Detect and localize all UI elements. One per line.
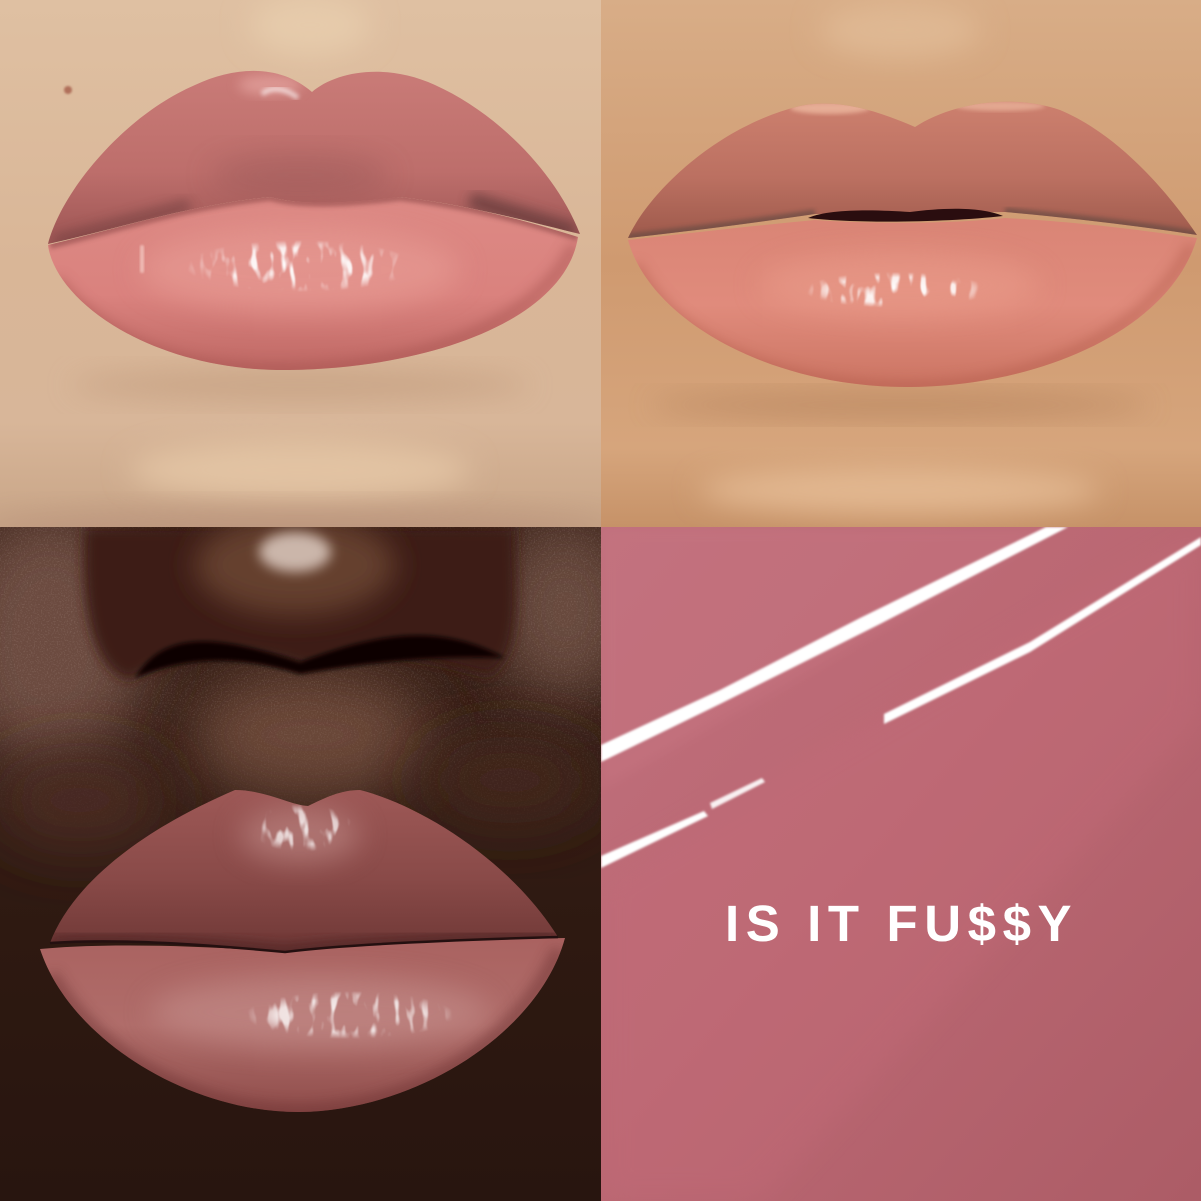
- open mouth: [808, 209, 1003, 222]
- nose: [84, 527, 516, 680]
- gloss streak 2: [884, 537, 1201, 724]
- heading: IS IT FU$$Y: [725, 895, 1078, 952]
- panel: light skin lips photo: [0, 0, 620, 547]
- gloss streak 3: [601, 811, 708, 868]
- panel: deep skin lips photo: [0, 510, 640, 1201]
- panel: medium skin lips photo: [601, 0, 1201, 527]
- lower lip: [628, 218, 1197, 387]
- gloss streak 1: [601, 527, 1068, 762]
- lower lip: [48, 197, 578, 370]
- lower lip: [40, 938, 565, 1112]
- upper lip: [50, 790, 558, 951]
- upper lip: [628, 102, 1197, 238]
- panel: gloss swatch: [601, 527, 1201, 1201]
- upper lip: [48, 70, 580, 244]
